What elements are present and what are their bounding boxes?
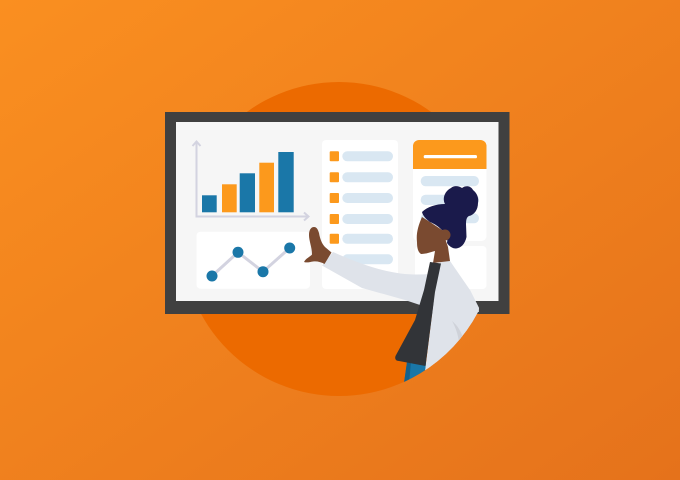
presenter hair <box>422 186 478 248</box>
presenter neck and face <box>417 217 450 263</box>
presenter lapel <box>395 262 441 366</box>
list bullets <box>330 151 339 244</box>
header line <box>424 155 477 158</box>
monitor frame <box>165 112 510 314</box>
lower right card <box>415 246 486 289</box>
card lines <box>421 176 479 223</box>
line chart card <box>196 232 310 289</box>
presenter trousers <box>404 362 426 382</box>
list card <box>322 140 398 289</box>
presenter <box>304 186 479 397</box>
bars <box>202 152 294 212</box>
chart axes <box>192 142 308 220</box>
card header <box>413 140 486 169</box>
presenter coat <box>322 252 479 370</box>
list lines <box>342 151 393 264</box>
line chart <box>212 248 290 276</box>
monitor <box>165 112 510 314</box>
backdrop circle <box>182 82 496 396</box>
line chart points <box>206 242 295 282</box>
bar chart <box>192 142 308 220</box>
monitor screen <box>176 122 498 301</box>
presenter ear <box>440 230 450 240</box>
header card <box>413 140 486 241</box>
presenter hand <box>304 227 332 264</box>
